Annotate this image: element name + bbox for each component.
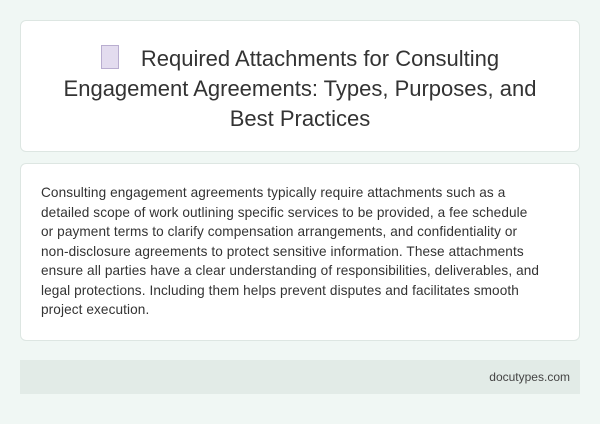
text block: description: non-disclosure agreements to protect sensitive information. These attachments — [41, 244, 524, 258]
panel: title card — [20, 20, 580, 152]
text block: description: or payment terms to clarify compensation arrangements, and confidentiality or — [41, 224, 517, 239]
title: Engagement Agreements: Types, Purposes, and — [64, 76, 536, 101]
text block: description: detailed scope of work outlining specific services to be provided, a fee schedule — [41, 204, 527, 220]
panel: description — [20, 163, 580, 341]
title: Required Attachments for Consulting — [141, 46, 499, 71]
text block: description: legal protections. Including them helps prevent disputes and facilitates smooth — [41, 282, 519, 298]
text block: description: ensure all parties have a clear understanding of responsibilities, deliverables, and — [41, 263, 539, 278]
footer text: docutypes.com — [489, 370, 570, 384]
text block: description — [41, 185, 539, 317]
text block: description: Consulting engagement agreements typically require attachments such as a — [41, 185, 505, 200]
icon: document scroll — [101, 45, 119, 69]
footer — [20, 360, 580, 394]
title: Best Practices — [230, 106, 370, 131]
text block: description: project execution. — [41, 302, 149, 317]
title — [64, 45, 536, 131]
